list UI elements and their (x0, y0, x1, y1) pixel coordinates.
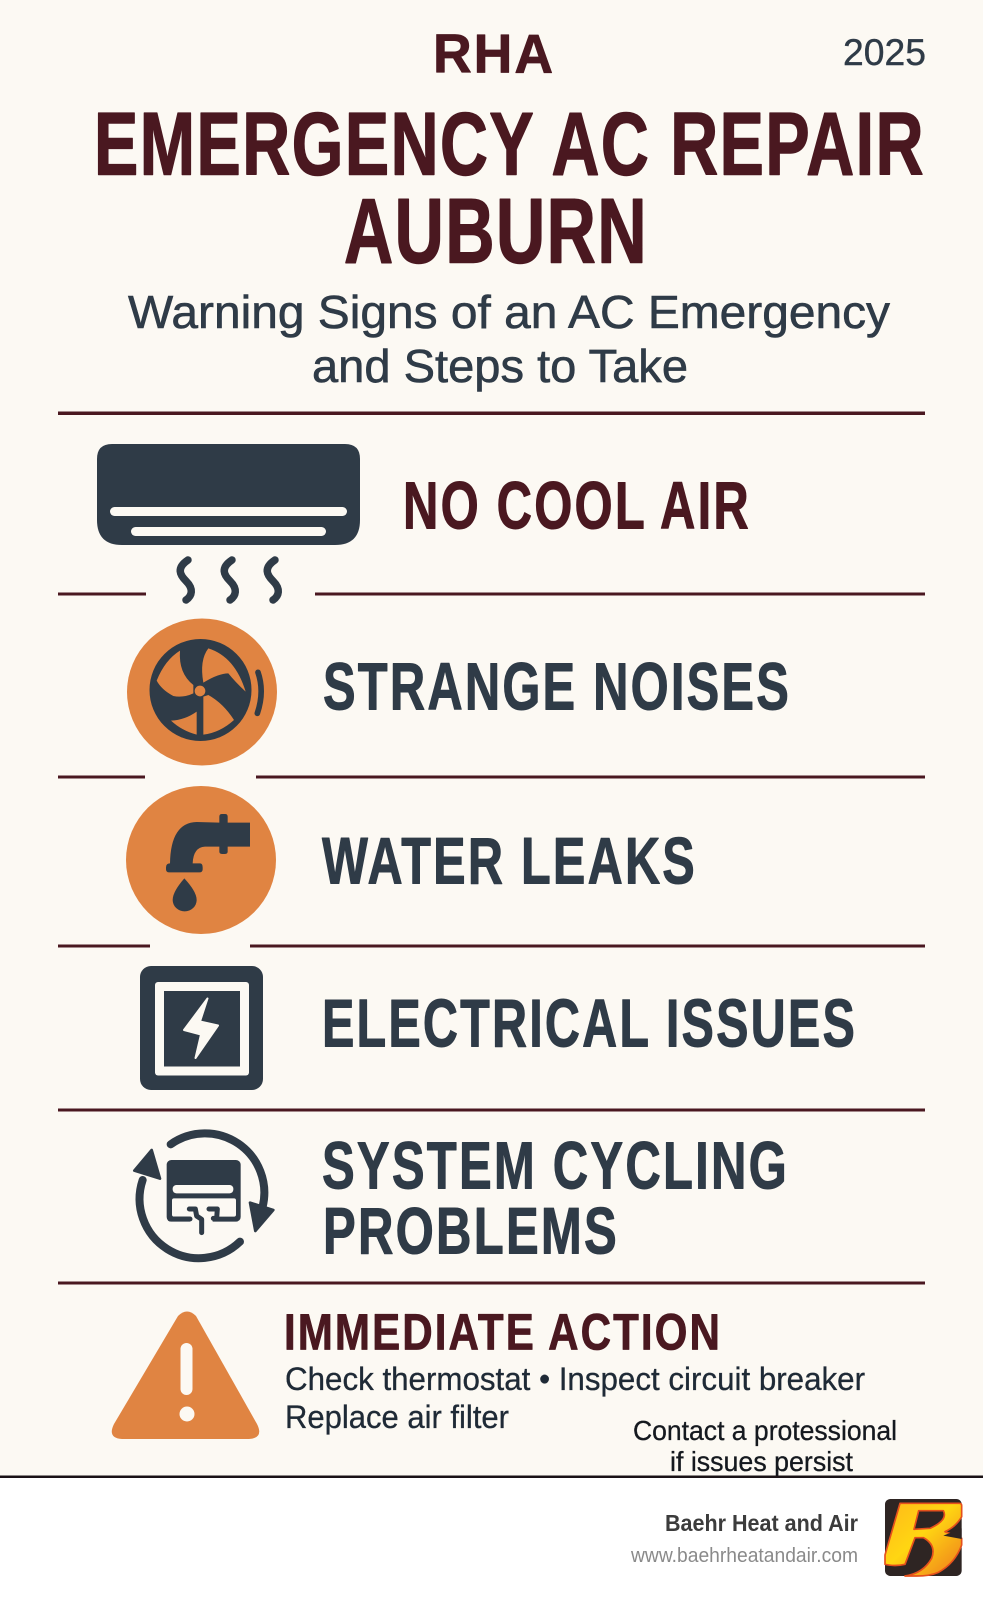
icon: dripping pipe in orange circle (126, 786, 276, 934)
icon: wall AC unit (97, 444, 360, 600)
icon: warning triangle (112, 1312, 259, 1439)
callout: contact a professional: Contact a protessional (633, 1415, 897, 1446)
row: water leaks (126, 786, 697, 934)
callout: contact a professional: if issues persist (670, 1446, 853, 1477)
subtitle: Warning Signs of an AC Emergency (128, 286, 890, 338)
icon: electrical panel (140, 966, 263, 1090)
website: www.baehrheatandair.com (630, 1545, 858, 1567)
callout: contact a professional (633, 1415, 897, 1477)
panel: immediate action (112, 1304, 897, 1477)
row: system cycling problems (134, 1128, 789, 1268)
row: electrical issues (140, 966, 857, 1090)
title (94, 94, 925, 282)
label: system cycling problems (322, 1128, 789, 1268)
heading: immediate action: IMMEDIATE ACTION (284, 1304, 722, 1360)
title: AUBURN (344, 180, 648, 282)
label: system cycling problems: SYSTEM CYCLING (322, 1128, 789, 1204)
label: no cool air: NO COOL AIR (403, 468, 751, 544)
row: no cool air (97, 444, 751, 600)
icon: fan in orange circle (127, 618, 277, 766)
footer (0, 1476, 983, 1600)
action list (285, 1361, 865, 1435)
label: system cycling problems: PROBLEMS (323, 1194, 619, 1268)
company name: Baehr Heat and Air (665, 1510, 858, 1536)
action list: Replace air filter (285, 1399, 509, 1435)
brand: RHA: RHA (433, 22, 555, 84)
subtitle (128, 286, 890, 392)
icon: cycling arrows around AC unit (134, 1133, 273, 1258)
logo: B mark (885, 1499, 962, 1576)
row: strange noises (127, 618, 791, 766)
year: 2025: 2025 (843, 32, 926, 73)
action list: Check thermostat • Inspect circuit breaker (285, 1361, 865, 1397)
label: water leaks: WATER LEAKS (322, 824, 697, 898)
subtitle: and Steps to Take (312, 340, 688, 392)
label: strange noises: STRANGE NOISES (323, 650, 791, 724)
